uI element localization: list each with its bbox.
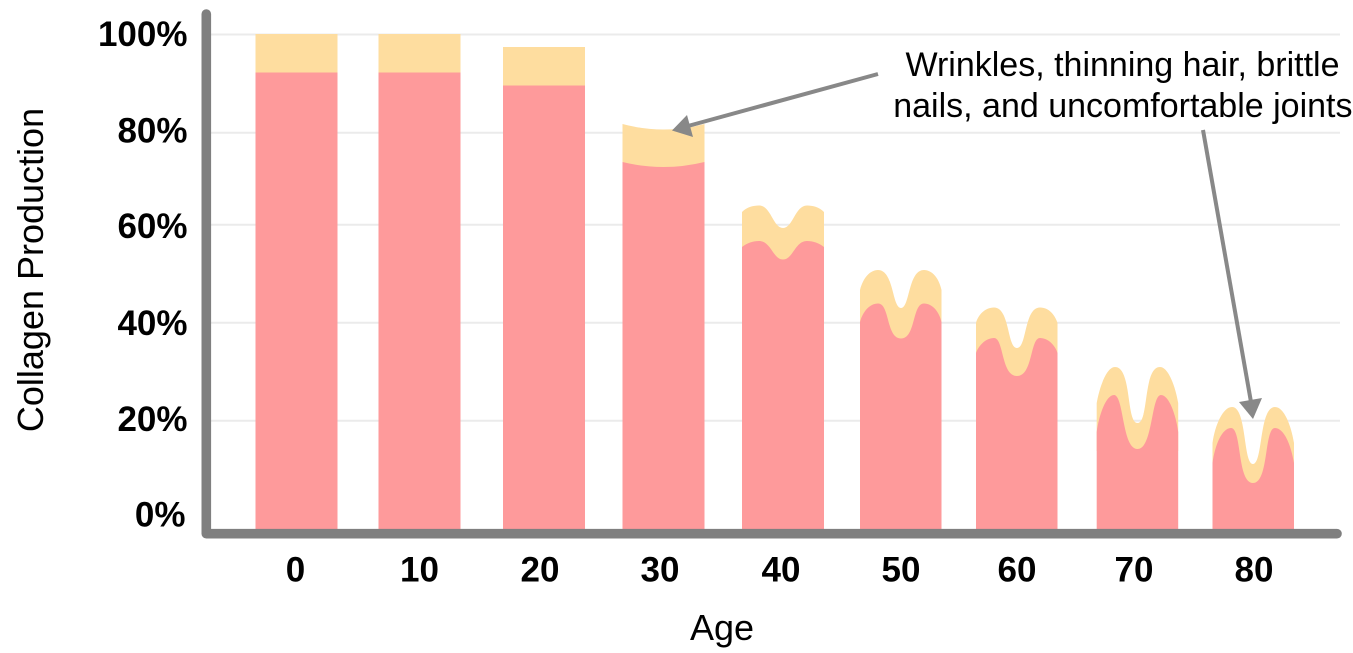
y-axis tick labels [98,15,188,534]
bar: age 10 [378,34,460,530]
arrow: to age 30 bar [672,74,878,137]
callout text: nails, and uncomfortable joints [893,87,1352,125]
bar: age 60 [976,308,1058,530]
bar: age 0 [256,34,338,530]
arrow: to age 80 bar [1203,130,1262,419]
x-axis tick labels: 80 [1235,550,1273,590]
x-axis title: Age [690,607,754,648]
bar: age 20 [503,47,585,530]
y-axis tick labels: 0% [135,496,186,534]
y-axis tick labels: 80% [117,112,188,150]
x-axis tick labels: 40 [762,550,800,590]
x-axis tick labels: 60 [998,550,1036,590]
callout text: Wrinkles, thinning hair, brittle [905,46,1340,84]
bar: age 30 [622,124,704,530]
y-axis tick labels: 100% [98,15,188,54]
y-axis title: Collagen Production [10,108,51,432]
x-axis tick labels: 70 [1115,550,1153,590]
bar: age 50 [860,270,942,530]
x-axis tick labels: 10 [400,550,439,590]
bar: age 70 [1097,367,1178,530]
callout text [893,46,1352,125]
x-axis tick labels: 0 [286,550,305,590]
chart axes [206,14,1337,534]
x-axis tick labels: 50 [882,550,920,590]
bar: age 80 [1212,407,1294,530]
y-axis tick labels: 20% [117,400,188,439]
x-axis tick labels: 20 [521,550,559,590]
y-axis tick labels: 40% [117,304,188,343]
x-axis tick labels [286,550,1273,590]
y-axis tick labels: 60% [117,207,188,246]
x-axis tick labels: 30 [641,550,679,590]
bar: age 40 [742,206,824,530]
